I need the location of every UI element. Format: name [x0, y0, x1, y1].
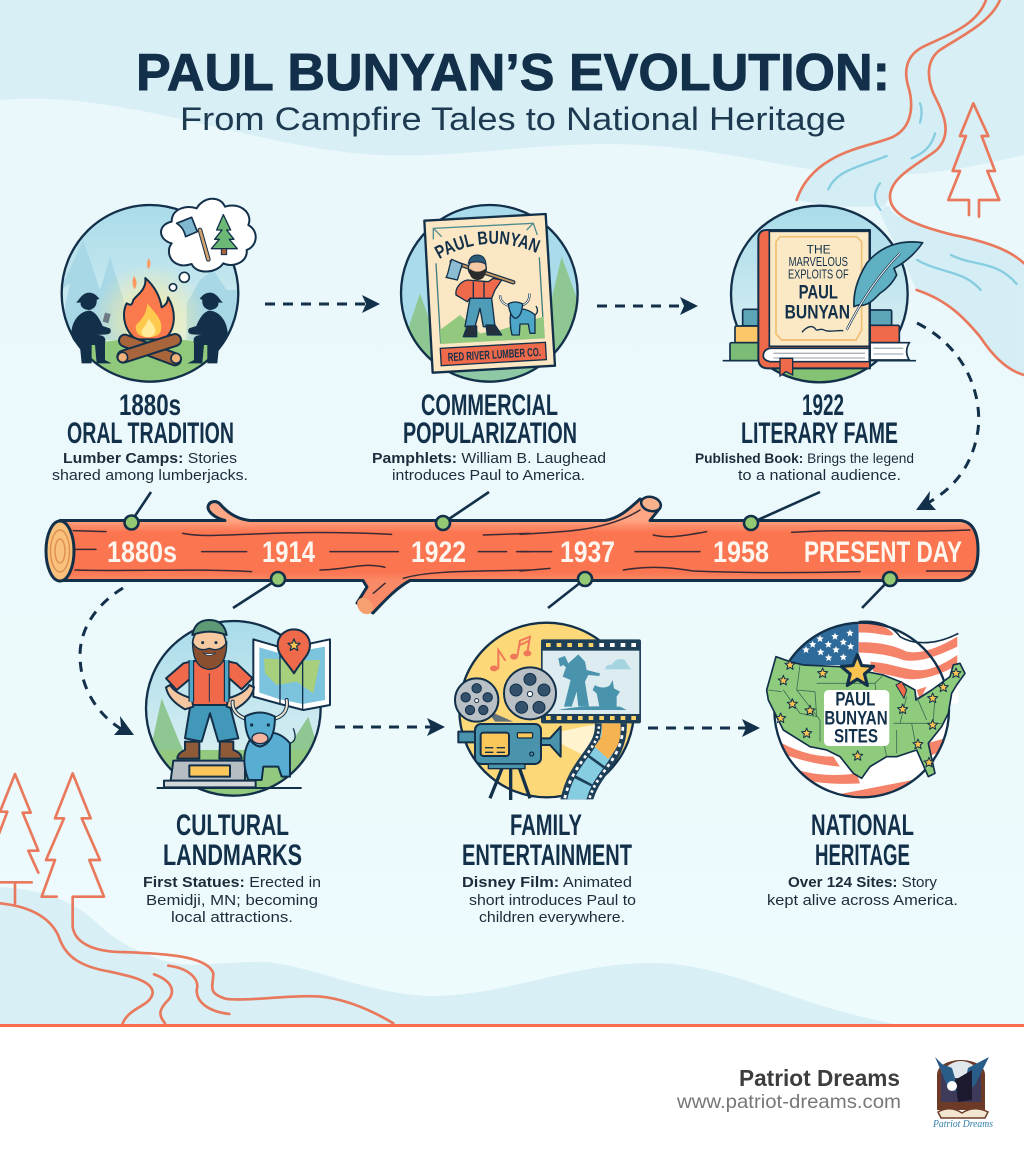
book title: BUNYAN — [785, 302, 850, 323]
heading block 6 — [767, 809, 958, 909]
log year labels — [107, 536, 962, 569]
website: www.patriot-dreams.com — [676, 1091, 901, 1113]
title: PAUL BUNYAN’S EVOLUTION: — [136, 44, 890, 102]
log year labels: 1922 — [411, 536, 466, 569]
heading block 2: COMMERCIAL — [421, 389, 558, 422]
heading block 3: Published Book: Brings the legend — [695, 451, 914, 466]
heading block 3: 1922 — [802, 389, 844, 422]
decor: river and trees bottom left — [0, 773, 393, 1023]
icon: statue — [146, 620, 330, 797]
log year labels: PRESENT DAY — [804, 536, 962, 569]
arrow — [597, 297, 698, 315]
arrow: curved down from log — [80, 588, 134, 735]
reels — [455, 667, 556, 722]
heading block 3: to a national audience. — [738, 468, 901, 484]
poster ox — [500, 293, 537, 335]
book cover — [758, 230, 870, 368]
poster banner — [440, 342, 546, 366]
heading block 6: kept alive across America. — [767, 893, 958, 909]
footer — [0, 1024, 1024, 1154]
icon: US map and flag — [767, 621, 965, 798]
logo: Patriot Dreams — [932, 1119, 993, 1130]
poster banner: RED RIVER LUMBER CO. — [447, 345, 541, 364]
heading block 4: LANDMARKS — [163, 839, 302, 872]
subtitle: From Campfire Tales to National Heritage — [180, 101, 846, 137]
icon: pamphlet — [400, 204, 579, 383]
bottom wave band — [0, 887, 900, 1027]
log year labels: 1937 — [560, 536, 615, 569]
icon: book — [723, 205, 923, 385]
top wave band — [0, 0, 1024, 175]
log year labels: 1880s — [107, 536, 177, 569]
heading block 1: ORAL TRADITION — [67, 417, 234, 450]
heading block 4: CULTURAL — [176, 809, 289, 842]
brand name: Patriot Dreams — [739, 1065, 900, 1091]
canton stars — [802, 629, 854, 661]
heading block 3: LITERARY FAME — [741, 417, 898, 450]
heading block 4 — [143, 809, 321, 926]
quill — [847, 242, 923, 330]
heading block 4: local attractions. — [171, 910, 293, 926]
book title: THE — [807, 242, 831, 256]
arrow — [265, 295, 380, 313]
map label — [824, 690, 889, 748]
flame — [124, 258, 174, 339]
book title — [785, 242, 850, 323]
heading block 2: POPULARIZATION — [403, 417, 577, 450]
logo — [932, 1057, 993, 1130]
lumberjack silhouettes — [71, 293, 228, 363]
flag stripes — [859, 621, 958, 703]
heading block 2: introduces Paul to America. — [392, 468, 585, 484]
heading block 5: FAMILY — [510, 809, 582, 842]
heading block 6: Over 124 Sites: Story — [788, 875, 938, 891]
connector pins — [124, 492, 897, 608]
timeline log — [46, 492, 978, 617]
film strip — [576, 720, 611, 803]
logs — [118, 340, 181, 363]
statue man — [166, 620, 254, 759]
log year labels: 1958 — [713, 536, 769, 569]
heading block 6: NATIONAL — [811, 809, 914, 842]
thought bubble — [161, 199, 256, 291]
heading block 4: Bemidji, MN; becoming — [146, 893, 318, 909]
stacked books — [730, 309, 909, 361]
log end rings — [46, 521, 74, 581]
heading block 3 — [695, 389, 914, 484]
heading block 5: children everywhere. — [479, 910, 625, 926]
map label: BUNYAN — [824, 708, 888, 729]
book title: PAUL — [799, 283, 838, 304]
poster lumberjack — [446, 255, 513, 337]
log year labels: 1914 — [262, 536, 315, 569]
heading block 6: HERITAGE — [815, 839, 910, 872]
music notes — [490, 637, 531, 671]
heading block 2: Pamphlets: William B. Laughead — [372, 451, 606, 467]
heading block 5: short introduces Paul to — [469, 893, 636, 909]
heading block 5 — [462, 809, 636, 926]
arrow: curved down to log — [916, 323, 979, 510]
heading block 4: First Statues: Erected in — [143, 875, 321, 891]
map — [253, 629, 330, 710]
book title: MARVELOUS — [789, 255, 848, 269]
map label: SITES — [834, 727, 878, 748]
heading block 2 — [372, 389, 606, 484]
book title: EXPLOITS OF — [788, 268, 849, 282]
ox — [233, 700, 295, 780]
heading block 1: shared among lumberjacks. — [52, 468, 248, 484]
heading block 5: Disney Film: Animated — [462, 875, 632, 891]
heading block 1 — [52, 389, 248, 484]
arrow — [648, 719, 760, 737]
heading block 1: 1880s — [119, 389, 181, 422]
camera body — [458, 724, 561, 769]
poster title: PAUL BUNYAN — [434, 230, 540, 259]
map of USA — [767, 655, 965, 778]
heading block 5: ENTERTAINMENT — [462, 839, 632, 872]
decor: river and tree top right — [797, 0, 1024, 375]
base — [157, 761, 302, 788]
film frame — [541, 639, 641, 723]
icon: film camera — [455, 623, 641, 803]
map label: PAUL — [835, 690, 875, 711]
arrow — [335, 718, 445, 736]
heading block 1: Lumber Camps: Stories — [63, 451, 237, 467]
tripod — [490, 765, 530, 800]
icon: campfire scene — [60, 199, 256, 390]
